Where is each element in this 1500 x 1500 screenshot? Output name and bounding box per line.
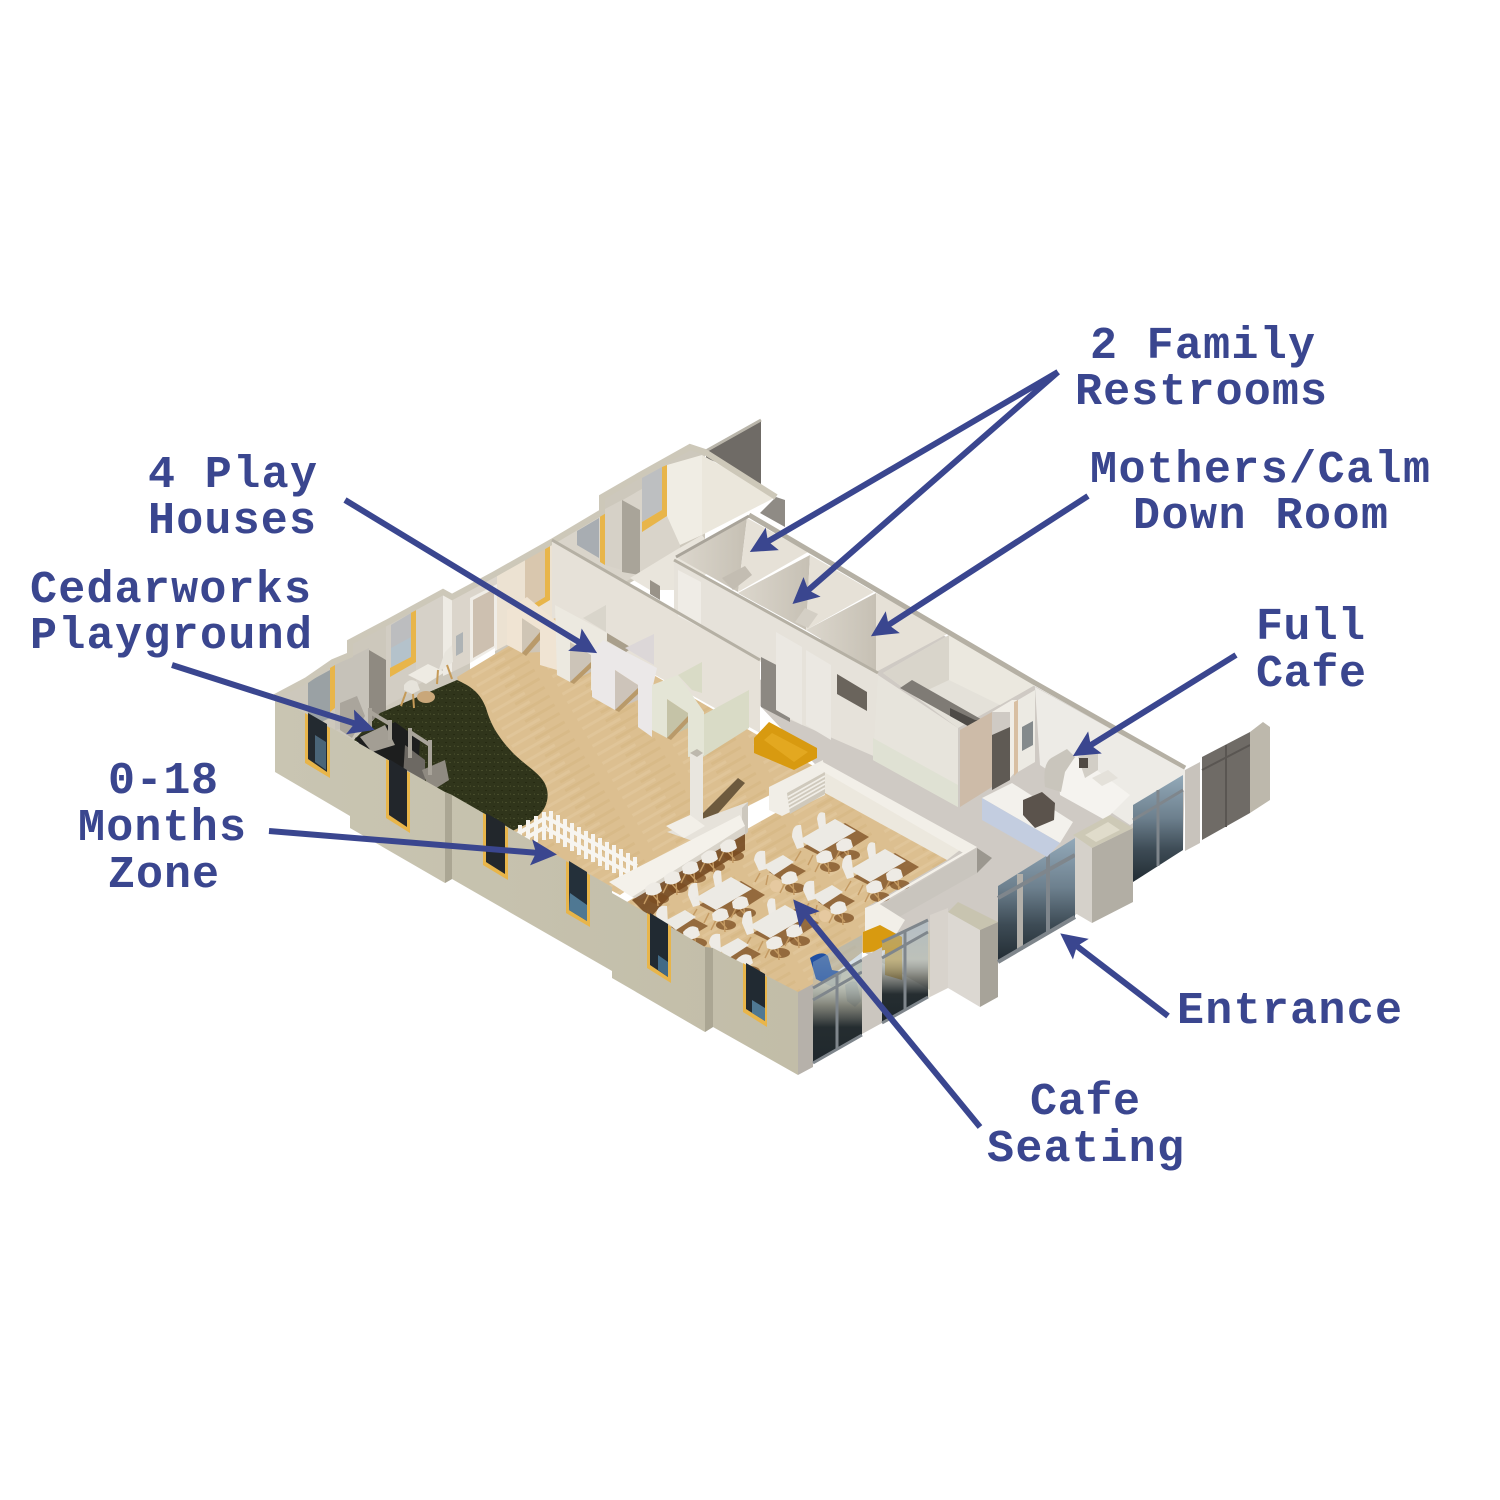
room: mothers calm down room [806,593,949,672]
play houses [507,597,749,757]
label: 2 Family Restrooms [1075,321,1327,418]
label: Cedarworks Playground: Cedarworks [30,565,311,616]
label: 0-18 Months Zone: 0-18 [108,756,218,807]
grey corridor floor [745,600,1185,990]
fence [517,811,637,885]
glass panel upper [577,518,599,558]
label: Cedarworks Playground: Playground [30,611,312,662]
grass area [354,680,548,832]
long central wall [552,540,878,758]
label: Cafe Seating [987,1077,1184,1175]
room: kitchen storage [883,635,1035,730]
label: Mothers/Calm Down Room [1090,445,1430,542]
table and chairs near play area [401,645,453,708]
label: Full Cafe: Cafe [1256,649,1366,700]
cafe counter [982,783,1073,857]
room: restroom 1 [676,518,808,592]
cafe seating floor [622,785,947,1000]
upper window yellow L [642,465,667,532]
big entrance pier [1073,815,1133,923]
glazing bay 3 entrance [998,838,1075,962]
window 3 [483,813,508,880]
far dark panel [1202,732,1250,840]
cafe seating enclosure walls [817,762,992,980]
window 2 [386,759,410,833]
dark door [992,727,1010,790]
label: Cafe Seating: Cafe [1030,1077,1140,1128]
window 4 [566,861,590,927]
label: Cafe Seating: Seating [987,1124,1184,1175]
room row outer wall cap [749,515,1185,768]
window with yellow frame [390,610,416,677]
pier 5 [1185,762,1200,851]
last pier [1250,722,1270,813]
label: 0-18 Months Zone [78,756,246,901]
label: 0-18 Months Zone: Zone [108,850,219,901]
north-west interior wall [275,447,785,745]
arrow: restroom 1 [755,372,1058,549]
sofa orange [754,722,817,770]
blue armchairs [810,953,861,1007]
arrow: cafe seating [797,904,980,1127]
label: Full Cafe: Full [1256,602,1365,653]
building: isometric floor plan [275,420,1270,1075]
label: Mothers/Calm Down Room: Down Room [1133,491,1388,542]
play house 1 [507,597,557,670]
door panel [452,570,507,672]
label: Mothers/Calm Down Room: Mothers/Calm [1090,445,1430,496]
south-west exterior stone wall [275,697,798,1075]
glazing bay 4 [1133,775,1183,882]
tan door panel [960,712,992,807]
wood floor main play area [457,618,817,895]
arrow: entrance [1065,937,1168,1016]
label: 4 Play Houses [148,450,317,547]
kitchen room front [873,675,1035,807]
glazing bay 1 [813,935,862,1063]
window 6 [743,963,767,1027]
label: 2 Family Restrooms: 2 Family [1090,321,1315,372]
arrow: cedarworks playground [172,665,369,728]
play house 4 [652,662,749,757]
label: 4 Play Houses: 4 Play [148,450,317,501]
pier 3 [930,902,998,1007]
diagonal shadow on floor [698,778,745,820]
window 1 [305,713,330,778]
pier 2 [862,947,882,1034]
cafe equipment [1023,749,1130,828]
bench [873,738,958,807]
window with yellow frame 2 [525,543,550,612]
playground [340,696,449,792]
south-east facade: corner pier [798,984,813,1075]
play house 3 [592,634,657,737]
wall mounted screen [837,674,867,711]
arrow: full cafe [1078,655,1236,753]
label: 0-18 Months Zone: Months [78,803,246,854]
label: 2 Family Restrooms: Restrooms [1075,367,1327,418]
cafe tables [656,812,919,978]
cafe chairs along half wall [644,839,744,906]
far dark end wall [704,420,761,484]
glazing bay 2 [882,920,930,1023]
orange sofa lower [863,925,902,980]
arrow: 0-18 months zone [269,831,551,854]
support column [690,749,703,821]
vent block [769,760,825,816]
label: 4 Play Houses: Houses [148,496,316,547]
half wall with bench [609,802,748,918]
arrow: mothers calm down room [876,496,1088,633]
arrow: 4 play houses [345,500,592,650]
corner glass panel [308,670,330,728]
label: Full Cafe [1256,602,1366,700]
window 5 [647,913,671,983]
arrow: restroom 2 [797,372,1058,600]
label: Cedarworks Playground [30,565,312,662]
label: Entrance: Entrance [1177,986,1402,1037]
room: restroom 2 [738,555,874,630]
cafe back wall [1035,687,1185,825]
play house 2 [555,605,607,697]
